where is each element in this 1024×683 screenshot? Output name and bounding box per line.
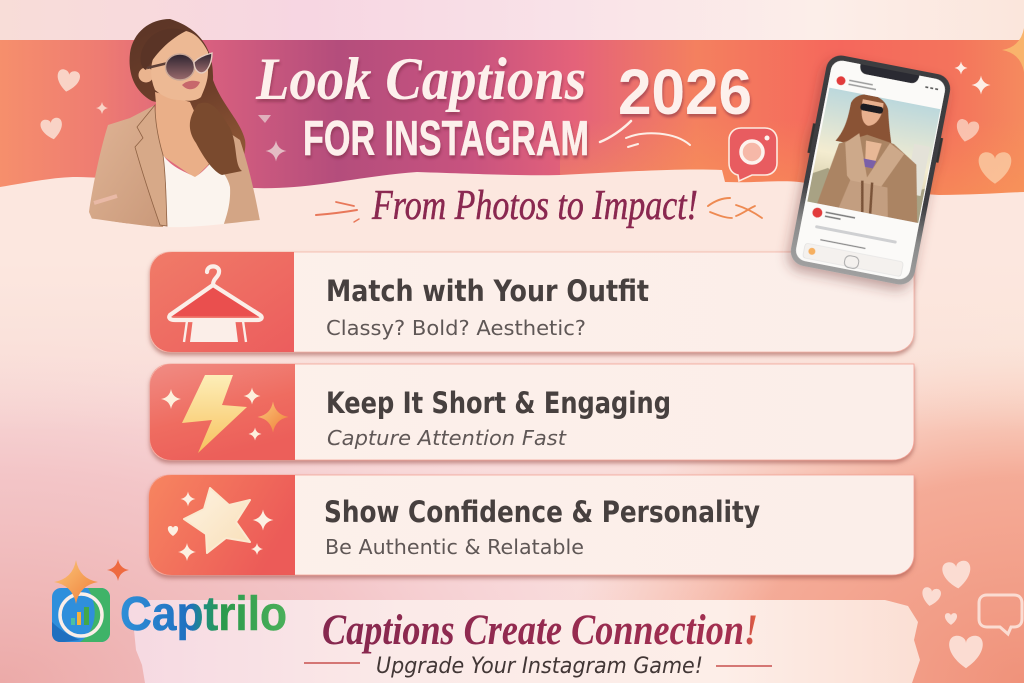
skin neck and chest [155, 92, 213, 178]
decorative hearts and sparkles: top left [40, 68, 286, 162]
icon: sparkles and heart [168, 492, 274, 561]
icon panel [149, 475, 295, 575]
icon: sparkles [161, 388, 288, 440]
logo wordmark: Captrilo [120, 588, 287, 641]
card 2: keep it short and engaging [150, 364, 914, 460]
post caption area [802, 207, 911, 278]
heading: Keep It Short & Engaging [326, 386, 671, 420]
subheading: Capture Attention Fast [327, 426, 567, 450]
photo of woman in trench coat [807, 87, 941, 223]
torn paper below banner [0, 169, 1024, 431]
ear [138, 68, 154, 82]
footer banner [124, 600, 920, 683]
card 1: match with your outfit [150, 252, 914, 352]
footer tagline: Upgrade Your Instagram Game! [376, 654, 703, 679]
decorative hearts and sparkles: top right [954, 28, 1024, 184]
lips [182, 81, 200, 89]
footer side lines [304, 663, 772, 666]
card body [150, 252, 914, 352]
sunglasses [147, 53, 212, 80]
screen [794, 59, 947, 281]
front hair lock [190, 103, 242, 175]
banner ribbon [0, 40, 1024, 200]
icon: lightning bolt [182, 375, 247, 453]
card body [150, 364, 914, 460]
icon: star [184, 488, 250, 553]
jacket left [89, 105, 168, 228]
icon: hanger [169, 266, 262, 342]
lower jacket shadow line [94, 196, 117, 203]
foreground paper covering figure base [0, 218, 800, 263]
face [151, 31, 208, 101]
instagram bubble icon [729, 128, 777, 181]
profile header [836, 70, 939, 104]
white top [163, 155, 230, 228]
subheading: Classy? Bold? Aesthetic? [326, 316, 586, 340]
footer headline: Captions Create Connection! [322, 607, 758, 654]
subtitle flourish right [708, 198, 762, 218]
phone mockup [787, 53, 954, 287]
subtitle: From Photos to Impact: From Photos to Impact! [371, 183, 698, 229]
decorative hearts and chat bubble: bottom right [920, 560, 1022, 668]
phone frame [788, 53, 953, 287]
woman illustration [89, 19, 260, 228]
hair part over forehead [141, 29, 186, 70]
heading: Show Confidence & Personality [324, 495, 760, 529]
icon panel [150, 364, 295, 460]
title: Look Captions: Look Captions [255, 46, 586, 112]
side buttons [809, 114, 942, 177]
back hair [130, 19, 245, 175]
subheading: Be Authentic & Relatable [325, 535, 584, 559]
jacket lapel [135, 105, 167, 226]
logo stars [54, 559, 129, 604]
heading: Match with Your Outfit [326, 274, 649, 308]
title: year 2026: 2026 [618, 56, 752, 128]
title flourish strokes [600, 121, 690, 147]
card body [149, 475, 914, 575]
icon panel [150, 252, 294, 352]
logo: Captrilo [52, 559, 287, 642]
title: FOR INSTAGRAM: FOR INSTAGRAM [303, 112, 589, 166]
jacket right [213, 122, 260, 228]
notch [859, 64, 919, 84]
card 3: show confidence and personality [149, 475, 914, 575]
logo square icon [52, 588, 110, 642]
subtitle flourish left [316, 202, 359, 222]
